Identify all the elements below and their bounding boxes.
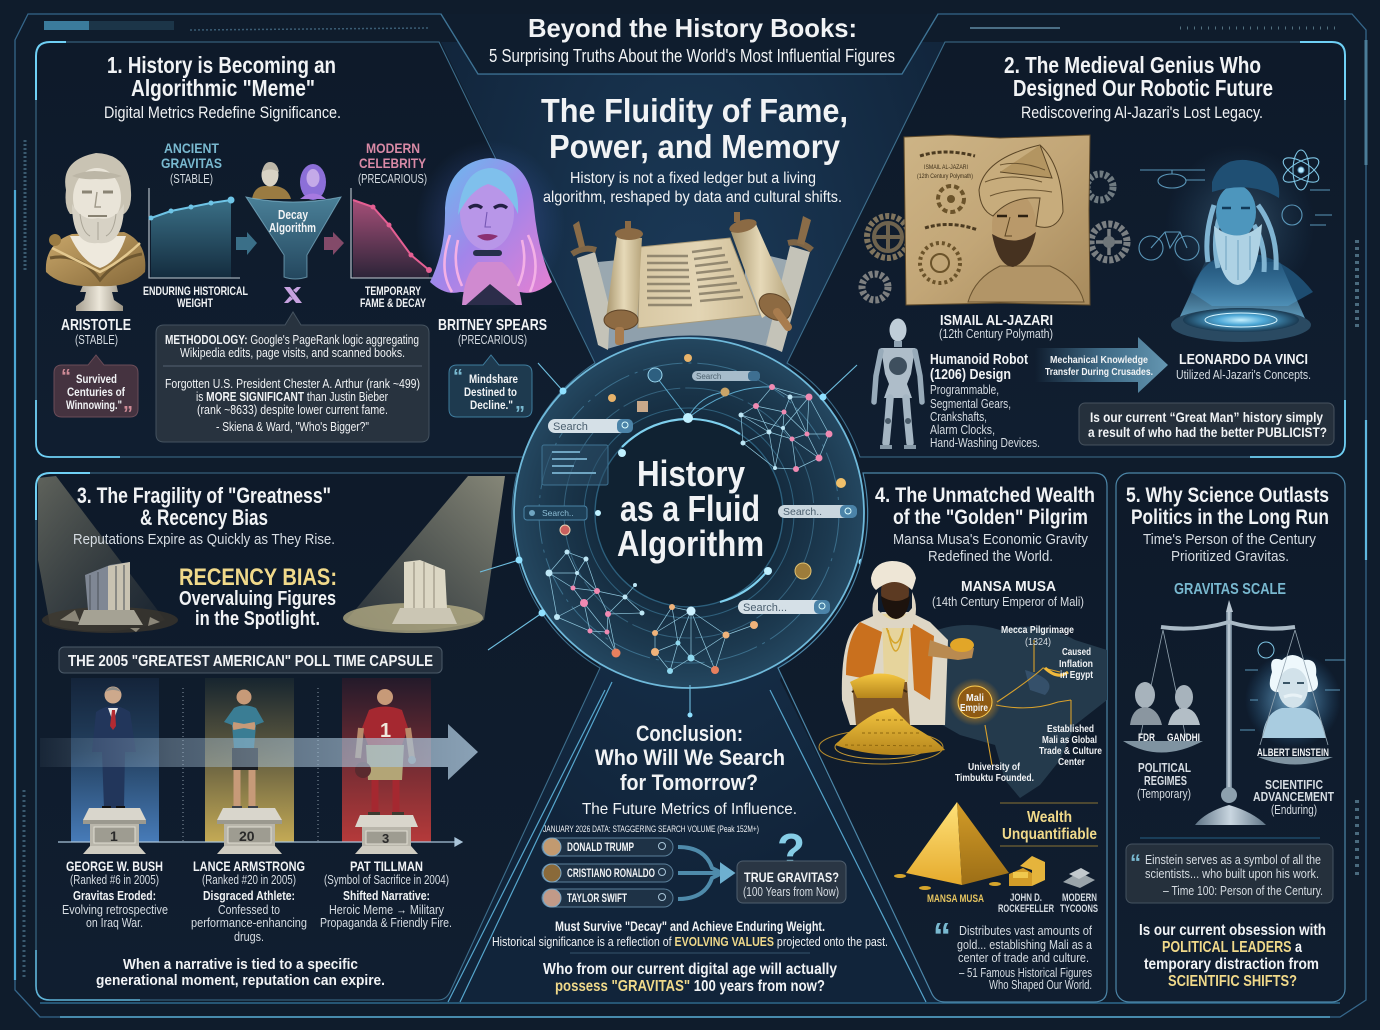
center title (617, 453, 764, 564)
map labels: Established (1047, 723, 1094, 735)
title trapezoid: 5 Surprising Truths About the World's Most Influential Figures (489, 46, 895, 66)
search bars: Search.. (542, 508, 574, 518)
network top right (738, 384, 832, 472)
true gravitas box (737, 861, 846, 903)
caption: bush: Evolving retrospective (62, 903, 168, 917)
callout: mindshare: Decline." (470, 398, 513, 412)
arrow: knowledge transfer: Transfer During Crusades. (1045, 366, 1153, 378)
conclusion heading: The Future Metrics of Influence. (582, 801, 797, 818)
map labels: in Egypt (1060, 669, 1093, 681)
center heading: History is not a fixed ledger but a living (570, 170, 816, 187)
methodology box (156, 312, 429, 442)
chart: ancient gravitas: ANCIENT (164, 140, 219, 156)
quote box 5: scientists... who built upon his work. (1145, 867, 1319, 881)
arrow: to celebrity (324, 232, 344, 255)
scale labels: GANDHI (1167, 732, 1200, 744)
arrow: knowledge transfer: Mechanical Knowledge (1050, 354, 1148, 366)
heading 5: 5. Why Science Outlasts (1126, 484, 1329, 507)
wealth labels: MANSA MUSA (927, 893, 984, 905)
panel: 3 fragility of greatness (36, 473, 600, 1000)
search bars (524, 371, 857, 614)
heading 1: 1. History is Becoming an (107, 52, 336, 78)
methodology box: is MORE SIGNIFICANT than Justin Bieber (196, 390, 388, 404)
search bars: Search (696, 372, 721, 381)
heading 5 (1126, 484, 1329, 565)
caption: armstrong: (Ranked #20 in 2005) (202, 873, 296, 887)
conclusion section: JANUARY 2026 DATA: STAGGERING SEARCH VOLUME (Peak 152M+) (543, 824, 759, 835)
heading 3 (73, 483, 335, 548)
callout: survived: Survived (76, 372, 117, 386)
scale labels: (Enduring) (1271, 803, 1317, 817)
caption: armstrong: Confessed to (218, 903, 280, 917)
figure: bush (92, 686, 136, 810)
methodology box: Wikipedia edits, page visits, and scanned books. (180, 346, 405, 360)
question box 2: a result of who had the better PUBLICIST? (1088, 424, 1327, 440)
heading 4: 4. The Unmatched Wealth (875, 484, 1095, 507)
search pill: swift: TAYLOR SWIFT (567, 893, 627, 905)
recency bias text: RECENCY BIAS: (179, 564, 337, 591)
caption: tillman: PAT TILLMAN (350, 858, 423, 874)
quote 4: gold... establishing Mali as a (957, 938, 1092, 952)
search pill: trump: DONALD TRUMP (567, 842, 634, 854)
heading 5: Politics in the Long Run (1131, 506, 1329, 529)
scale labels: ADVANCEMENT (1253, 789, 1334, 804)
icon: broken column left (60, 562, 160, 632)
icon: leonardo hologram (1165, 145, 1315, 342)
callout: mindshare (449, 355, 532, 425)
callout: survived (54, 355, 138, 425)
conclusion heading (582, 721, 797, 818)
callout: survived: Centuries of (67, 385, 126, 399)
funnel: decay algorithm: Algorithm (269, 221, 316, 235)
chart: ancient gravitas: WEIGHT (177, 298, 213, 310)
heading 1: Algorithmic "Meme" (131, 75, 315, 101)
robot text: Segmental Gears, (930, 397, 1011, 411)
label: britney: (PRECARIOUS) (458, 332, 527, 347)
chart: modern celebrity: TEMPORARY (365, 286, 421, 298)
chart: modern celebrity (351, 140, 437, 310)
search bars: Search.. (783, 506, 822, 518)
caption: bush: (Ranked #6 in 2005) (70, 873, 159, 887)
arrow: merge (678, 847, 732, 899)
icon: hologram doodles (1139, 150, 1332, 260)
icon: parchment portrait: ISMAIL AL-JAZARI (924, 164, 968, 171)
chart: modern celebrity: FAME & DECAY (360, 298, 426, 310)
methodology box: Forgotten U.S. President Chester A. Arthur (rank ~499) (165, 377, 420, 391)
true gravitas box: (100 Years from Now) (743, 885, 839, 899)
question 5: POLITICAL LEADERS a (1162, 939, 1302, 956)
pedestal: 20 (217, 808, 282, 854)
robot text: Alarm Clocks, (930, 423, 995, 437)
map labels (955, 624, 1102, 784)
pedestal: 1: 1 (110, 828, 118, 844)
wealth labels: MODERN (1062, 892, 1097, 904)
center title: History (637, 453, 745, 494)
center heading (541, 92, 848, 206)
label: leonardo: Utilized Al-Jazari's Concepts. (1176, 367, 1311, 382)
takeaway 3: generational moment, reputation can expire. (96, 972, 385, 989)
takeaway 3 (96, 956, 385, 989)
heading 4: Mansa Musa's Economic Gravity (893, 531, 1088, 548)
chart: ancient gravitas: ENDURING HISTORICAL (143, 286, 248, 298)
icon: gold blocks (1009, 856, 1045, 886)
methodology box: - Skiena & Ward, "Who's Bigger?" (216, 420, 369, 434)
icon: mansa musa (819, 561, 974, 764)
wealth heading (1000, 803, 1098, 846)
search pill: swift (542, 889, 673, 907)
caption: bush (62, 858, 168, 930)
conclusion heading: Conclusion: (636, 721, 743, 746)
wealth heading: Unquantifiable (1002, 826, 1097, 843)
map labels: Mecca Pilgrimage (1001, 624, 1074, 636)
map labels: (1324) (1025, 636, 1051, 648)
icon: question mark: ? (777, 824, 805, 876)
mansa musa label: (14th Century Emperor of Mali) (932, 594, 1084, 609)
center heading: algorithm, reshaped by data and cultural shifts. (543, 189, 842, 206)
center ring algorithm (480, 338, 890, 718)
methodology box: METHODOLOGY: Google's PageRank logic aggregating (165, 333, 419, 347)
map (910, 625, 1107, 798)
heading 3: Reputations Expire as Quickly as They Rise. (73, 531, 335, 548)
caption: tillman: Heroic Meme → Military (329, 903, 445, 917)
heading 4 (875, 484, 1095, 565)
chart: ancient gravitas: (STABLE) (170, 171, 213, 186)
conclusion heading: Who Will We Search (595, 745, 785, 770)
caption: armstrong: performance-enhancing (191, 916, 307, 930)
conclusion text: Historical significance is a reflection of EVOLVING VALUES projected onto the past. (492, 934, 888, 949)
center heading: The Fluidity of Fame, (541, 92, 848, 129)
caption: tillman: Propaganda & Friendly Fire. (320, 916, 452, 930)
icon: x logo (284, 287, 302, 303)
caption: bush: Gravitas Eroded: (73, 889, 156, 903)
arrow: knowledge transfer (1035, 337, 1168, 393)
scale labels: (Temporary) (1137, 787, 1191, 801)
search bars: Search (553, 421, 588, 433)
robot text: Humanoid Robot (930, 352, 1028, 368)
center background zone (440, 42, 945, 1002)
quote 4: – 51 Famous Historical Figures (959, 966, 1092, 980)
scale labels: ALBERT EINSTEIN (1257, 747, 1329, 759)
label: al-jazari (939, 312, 1053, 341)
caption: armstrong: Disgraced Athlete: (203, 889, 295, 903)
network lower left (546, 550, 644, 658)
label: leonardo: LEONARDO DA VINCI (1179, 351, 1308, 368)
mansa musa label (932, 578, 1084, 609)
search bars: Search... (743, 602, 787, 614)
heading 2: Rediscovering Al-Jazari's Lost Legacy. (1021, 103, 1263, 122)
heading 2: Designed Our Robotic Future (1013, 75, 1273, 101)
icon: scroll (572, 212, 812, 352)
icon: robot (874, 318, 922, 447)
caption: bush: on Iraq War. (86, 916, 143, 930)
caption: tillman: Shifted Narrative: (343, 889, 430, 903)
heading 1: Digital Metrics Redefine Significance. (104, 103, 341, 122)
map labels: Empire (960, 702, 988, 714)
map labels: Trade & Culture (1039, 745, 1102, 757)
pedestal: 3: 3 (382, 831, 389, 846)
quote 4 (933, 915, 1092, 992)
chart: modern celebrity: CELEBRITY (359, 155, 427, 171)
question 5: Is our current obsession with (1139, 922, 1326, 939)
question box 2: Is our current “Great Man” history simply (1090, 409, 1323, 425)
icon: aristotle bust (46, 153, 145, 311)
search pill: ronaldo: CRISTIANO RONALDO (567, 868, 655, 880)
takeaway 3: When a narrative is tied to a specific (123, 956, 358, 973)
icon: parchment portrait: (12th Century Polymath) (917, 174, 973, 180)
quote box 5: “ (1130, 850, 1141, 875)
wealth labels: JOHN D. (1010, 892, 1042, 904)
icon: einstein (1240, 642, 1345, 748)
conclusion text: Who from our current digital age will actually (543, 961, 837, 978)
map labels: Center (1058, 756, 1085, 768)
robot text (930, 352, 1040, 450)
panel: 5 science outlasts politics: GRAVITAS SCALE (1174, 581, 1286, 598)
quote box 5 (1126, 844, 1333, 903)
callout: survived: ” (123, 403, 133, 425)
timeline axis (58, 838, 462, 846)
heading 3: & Recency Bias (140, 505, 268, 530)
icon: fdr and gandhi busts (1130, 682, 1200, 725)
icon: gears (862, 174, 1127, 300)
panel: 2 medieval genius (787, 42, 1345, 457)
center heading: Power, and Memory (549, 128, 841, 165)
chart: modern celebrity: (PRECARIOUS) (358, 171, 427, 186)
heading 5: Prioritized Gravitas. (1171, 548, 1289, 565)
callout: mindshare: Mindshare (469, 372, 518, 386)
caption: armstrong (191, 858, 307, 944)
label: britney (438, 317, 547, 347)
ring nodes (516, 354, 866, 718)
wealth labels: ROCKEFELLER (998, 903, 1054, 915)
chart: ancient gravitas (143, 140, 248, 310)
label: al-jazari: ISMAIL AL-JAZARI (940, 312, 1053, 329)
true gravitas box: TRUE GRAVITAS? (744, 870, 839, 885)
poll stripes (71, 678, 431, 842)
recency bias text: in the Spotlight. (195, 608, 320, 630)
caption: tillman: (Symbol of Sacrifice in 2004) (324, 873, 449, 887)
quote 4: Who Shaped Our World. (989, 978, 1092, 992)
search pill: ronaldo (542, 864, 673, 882)
conclusion section (448, 682, 926, 1002)
quote 4: Distributes vast amounts of (959, 924, 1092, 938)
chart: ancient gravitas: GRAVITAS (161, 155, 222, 171)
icon: gold pyramid (894, 802, 1009, 890)
network bottom (651, 604, 758, 674)
wealth labels: TYCOONS (1060, 903, 1098, 915)
map labels: Timbuktu Founded. (955, 772, 1034, 784)
arrow: to funnel (236, 232, 257, 255)
caption: tillman (320, 858, 452, 930)
wealth labels (927, 892, 1098, 915)
scale labels: POLITICAL (1138, 760, 1191, 775)
center title: as a Fluid (620, 488, 760, 529)
robot text: Hand-Washing Devices. (930, 436, 1040, 450)
panel: 4 golden pilgrim (778, 473, 1107, 1002)
map labels: University of (968, 761, 1020, 773)
callout: survived: Winnowing." (66, 398, 122, 412)
poll banner: THE 2005 "GREATEST AMERICAN" POLL TIME CAPSULE (68, 653, 433, 670)
scale labels: SCIENTIFIC (1265, 777, 1323, 792)
scale labels (1137, 732, 1334, 817)
scale labels: REGIMES (1144, 773, 1187, 788)
scale labels: FDR (1138, 732, 1155, 744)
search pill: trump (542, 838, 673, 856)
question 5: SCIENTIFIC SHIFTS? (1168, 973, 1297, 990)
robot text: Programmable, (930, 383, 999, 397)
heading 4: Redefined the World. (928, 548, 1053, 565)
pedestal: 20: 20 (239, 828, 255, 844)
callout: mindshare: ” (515, 403, 525, 425)
quote box 5: Einstein serves as a symbol of all the (1145, 853, 1321, 867)
map labels: Inflation (1059, 658, 1093, 670)
chart: modern celebrity: MODERN (366, 140, 420, 156)
icon: broken column right (392, 560, 457, 624)
heading 3: 3. The Fragility of "Greatness" (77, 483, 331, 508)
quote 4: center of trade and culture. (958, 951, 1089, 965)
map labels: Caused (1062, 646, 1091, 658)
pedestal: 3 (355, 815, 418, 854)
conclusion text: possess "GRAVITAS" 100 years from now? (555, 978, 825, 995)
heading 2 (1004, 52, 1273, 122)
icon: silver stack (1063, 868, 1095, 888)
label: britney: BRITNEY SPEARS (438, 317, 547, 334)
icon: parchment portrait (904, 135, 1090, 305)
question box 2 (1079, 403, 1334, 445)
callout: mindshare: Destined to (464, 385, 517, 399)
callout: mindshare: “ (453, 366, 463, 388)
recency bias text (179, 564, 337, 630)
label: aristotle: ARISTOTLE (61, 317, 131, 334)
funnel: decay algorithm (246, 162, 341, 279)
caption: bush: GEORGE W. BUSH (66, 858, 163, 874)
timeline arrow (40, 724, 478, 780)
heading 2: 2. The Medieval Genius Who (1004, 52, 1261, 78)
map labels: Mali (966, 692, 984, 704)
panel: 1 history meme (36, 42, 595, 457)
spotlights (38, 476, 505, 633)
label: aristotle: (STABLE) (75, 332, 118, 347)
quote 4: “ (933, 915, 951, 956)
mansa musa label: MANSA MUSA (961, 578, 1056, 595)
heading 5: Time's Person of the Century (1143, 531, 1316, 548)
icon: scale (1123, 600, 1333, 838)
figure: armstrong (224, 690, 264, 808)
heading 1 (104, 52, 341, 122)
label: al-jazari: (12th Century Polymath) (939, 326, 1053, 341)
caption: armstrong: LANCE ARMSTRONG (193, 858, 305, 874)
connectors (480, 363, 890, 715)
poll banner (59, 647, 442, 673)
conclusion text: Must Survive "Decay" and Achieve Enduring Weight. (555, 919, 825, 934)
conclusion text (492, 919, 888, 995)
robot text: Crankshafts, (930, 410, 987, 424)
heading 4: of the "Golden" Pilgrim (893, 506, 1088, 529)
panel: 5 science outlasts politics (1116, 473, 1345, 1002)
map labels: Mali as Global (1042, 734, 1097, 746)
callout: survived: “ (61, 366, 71, 388)
funnel: decay algorithm: Decay (278, 208, 308, 222)
title trapezoid: Beyond the History Books: (528, 13, 857, 43)
label: aristotle (61, 317, 131, 347)
quote box 5: – Time 100: Person of the Century. (1163, 884, 1323, 898)
icon: britney portrait (415, 140, 565, 310)
robot text: (1206) Design (930, 367, 1011, 383)
label: leonardo (1176, 351, 1311, 382)
figure: tillman (355, 689, 416, 814)
wealth heading: Wealth (1027, 809, 1072, 826)
caption: armstrong: drugs. (234, 930, 264, 944)
question 5: temporary distraction from (1144, 956, 1319, 973)
center title: Algorithm (617, 523, 764, 564)
question 5 (1139, 922, 1326, 990)
pedestal: 1 (83, 808, 146, 854)
title trapezoid (441, 13, 938, 74)
figure: tillman: 1 (380, 720, 391, 742)
conclusion heading: for Tomorrow? (620, 770, 758, 795)
recency bias text: Overvaluing Figures (179, 588, 336, 610)
methodology box: (rank ~8633) despite lower current fame. (197, 403, 388, 417)
